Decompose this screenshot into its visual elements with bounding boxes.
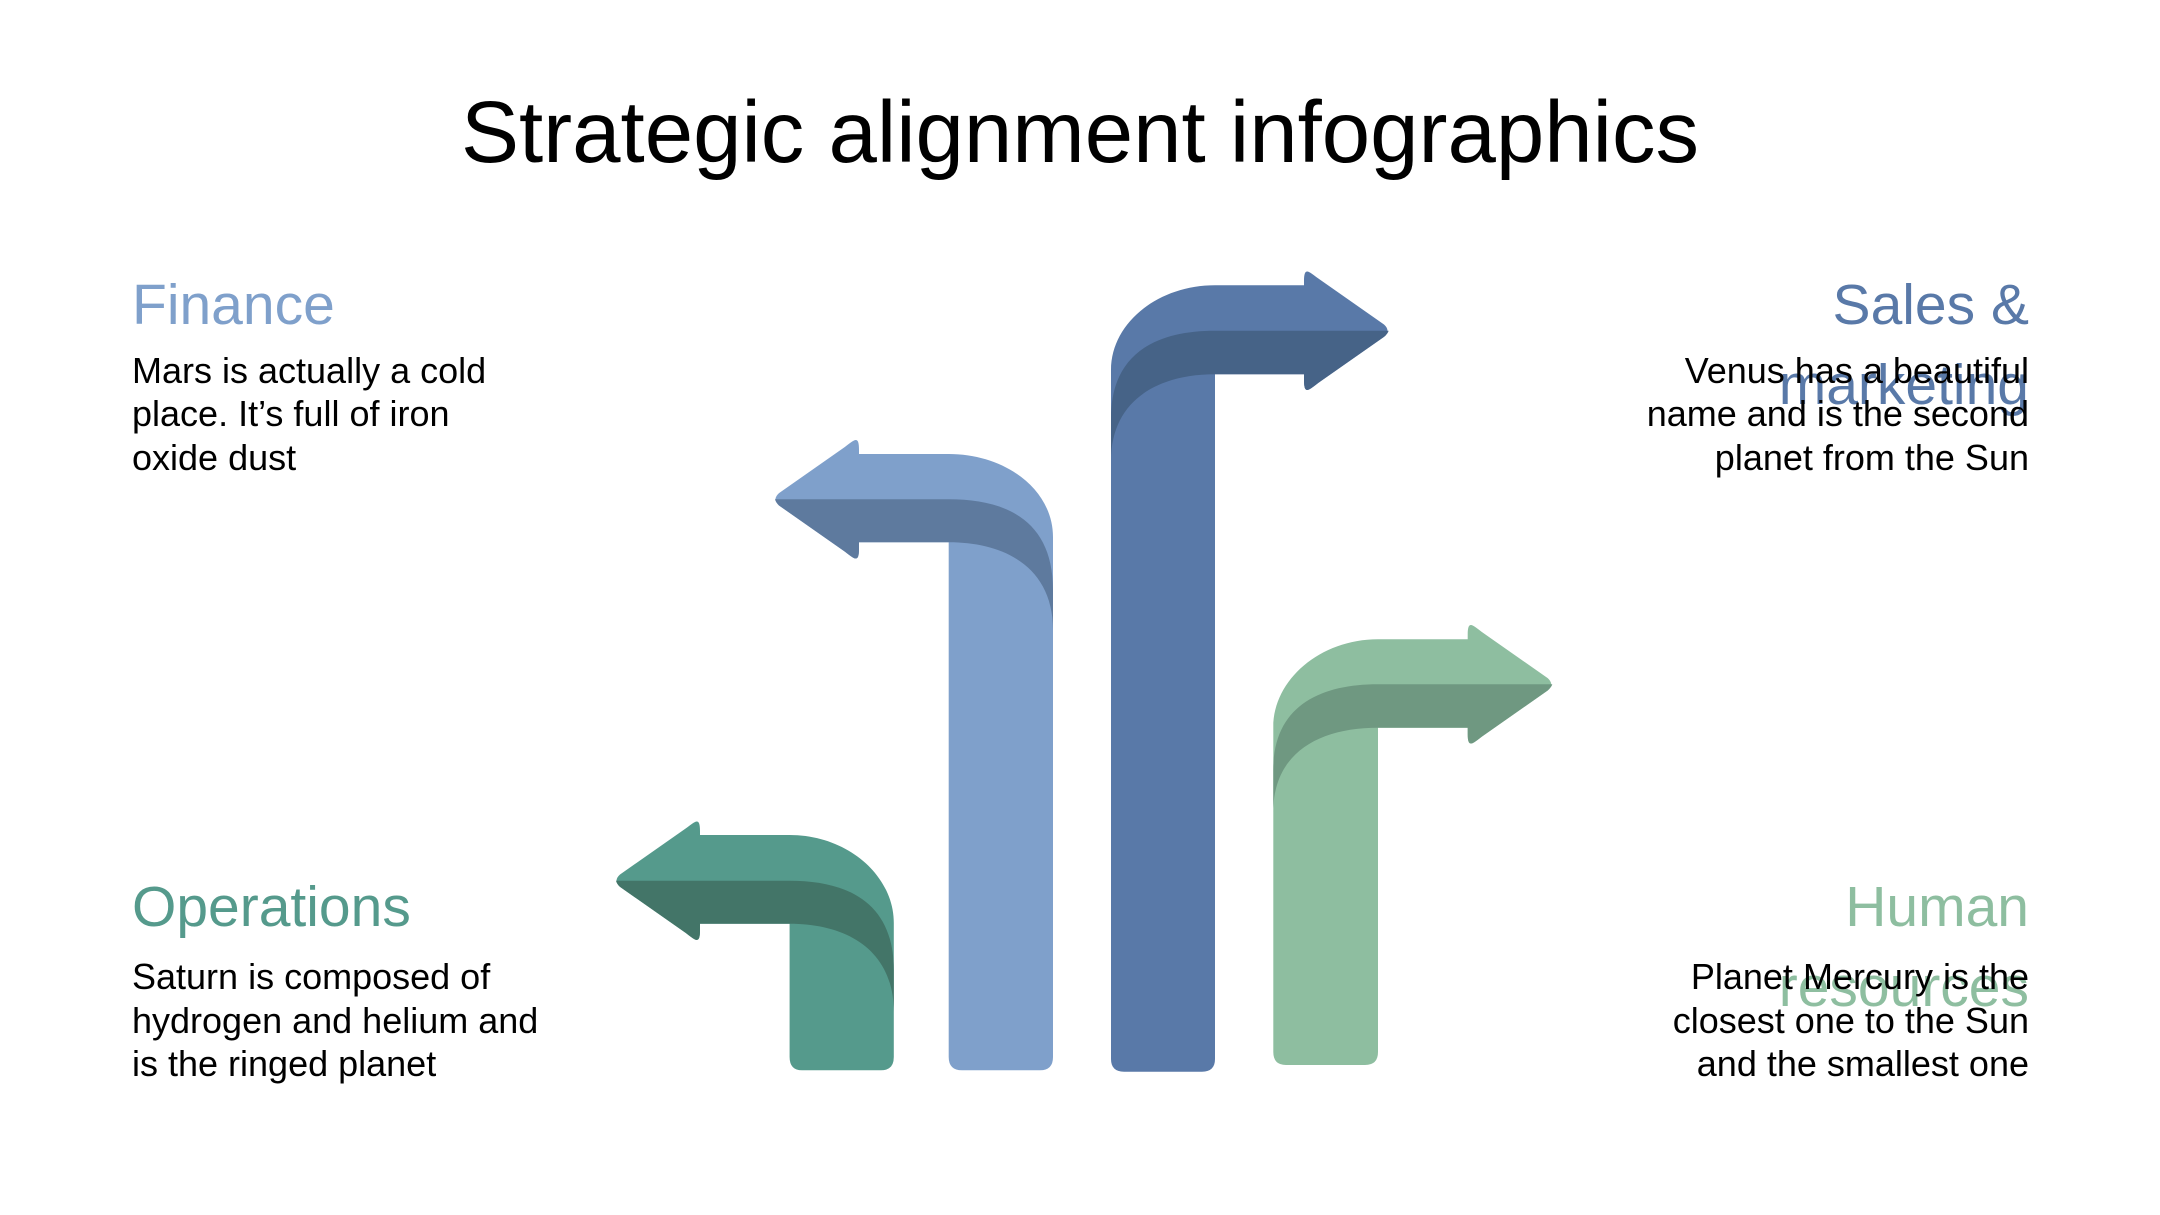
- heading: Human resources: resources: [1779, 955, 2029, 1019]
- text: Operations: Saturn is composed of: [132, 956, 490, 997]
- text: Sales & marketing: name and is the second: [1647, 393, 2029, 434]
- text: Finance: Mars is actually a cold: [132, 350, 486, 390]
- text: Sales & marketing: Venus has a beautiful: [1685, 350, 2029, 390]
- arrow: Operations: [616, 821, 894, 1070]
- title: Strategic alignment infographics: [461, 84, 1699, 181]
- heading: Sales & marketing: [1779, 273, 2029, 417]
- text: Operations: [132, 956, 538, 1084]
- arrow: Human resources: [1273, 625, 1552, 1065]
- heading: Operations: Operations: [132, 875, 411, 939]
- text: Finance: oxide dust: [132, 436, 296, 478]
- heading: Sales & marketing: marketing: [1779, 353, 2029, 417]
- heading: Human resources: [1779, 875, 2029, 1019]
- text: Operations: hydrogen and helium and: [132, 1000, 538, 1040]
- text: Sales & marketing: [1647, 350, 2029, 478]
- text: Human resources: Planet Mercury is the: [1691, 956, 2029, 997]
- text: Sales & marketing: planet from the Sun: [1715, 436, 2029, 478]
- heading: Sales & marketing: Sales &: [1833, 273, 2029, 337]
- text: Operations: is the ringed planet: [132, 1043, 436, 1084]
- arrow: Sales & marketing: [1111, 271, 1389, 1072]
- text: Finance: place. It’s full of iron: [132, 393, 450, 434]
- text: Human resources: and the smallest one: [1697, 1043, 2029, 1084]
- text: Human resources: closest one to the Sun: [1673, 1000, 2029, 1040]
- text: Human resources: [1673, 956, 2029, 1084]
- heading: Human resources: Human: [1845, 875, 2029, 939]
- arrow: Finance: [775, 440, 1053, 1070]
- text: Finance: [132, 350, 486, 478]
- heading: Finance: Finance: [132, 273, 335, 337]
